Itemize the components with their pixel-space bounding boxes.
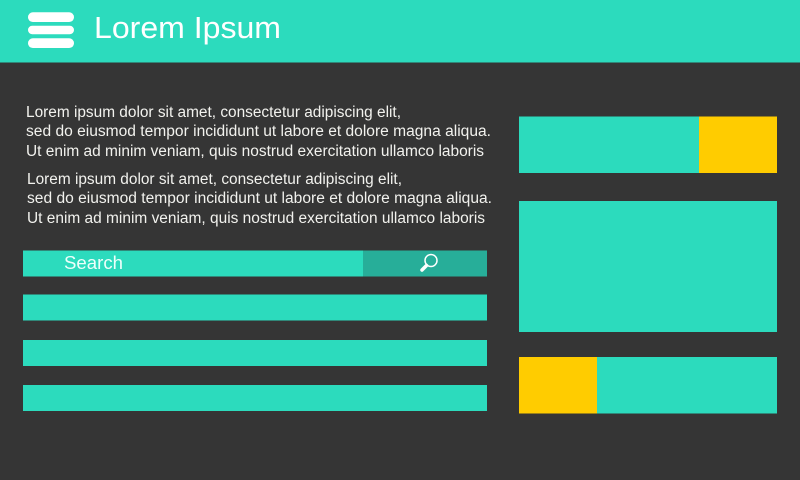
- text block: second paragraph: Ut enim ad minim veniam, quis nostrud exercitation ullamco laboris: [27, 210, 485, 227]
- text block: first paragraph: Lorem ipsum dolor sit amet, consectetur adipiscing elit,: [26, 104, 401, 121]
- list row 1: [23, 294, 487, 320]
- text block: second paragraph: sed do eiusmod tempor incididunt ut labore et dolore magna aliqua.: [27, 190, 492, 207]
- title: Lorem Ipsum: [94, 10, 281, 45]
- search label: Search: [64, 252, 123, 273]
- panel: large right block: [519, 201, 777, 332]
- text block: second paragraph: Lorem ipsum dolor sit amet, consectetur adipiscing elit,: [27, 171, 402, 188]
- search bar: [23, 250, 487, 276]
- icon: magnifying glass: [422, 254, 437, 270]
- text block: first paragraph: [26, 104, 491, 160]
- panel: top right bar with yellow segment: [519, 116, 777, 173]
- list row 2: [23, 340, 487, 366]
- header bar: [0, 0, 800, 62]
- text block: first paragraph: sed do eiusmod tempor incididunt ut labore et dolore magna aliqua.: [26, 123, 491, 140]
- icon: hamburger menu: [28, 12, 74, 48]
- panel: bottom right bar with yellow segment: [519, 357, 777, 414]
- text block: second paragraph: [27, 171, 492, 227]
- text block: first paragraph: Ut enim ad minim veniam, quis nostrud exercitation ullamco laboris: [26, 143, 484, 160]
- list row 3: [23, 385, 487, 411]
- search button: [363, 250, 487, 276]
